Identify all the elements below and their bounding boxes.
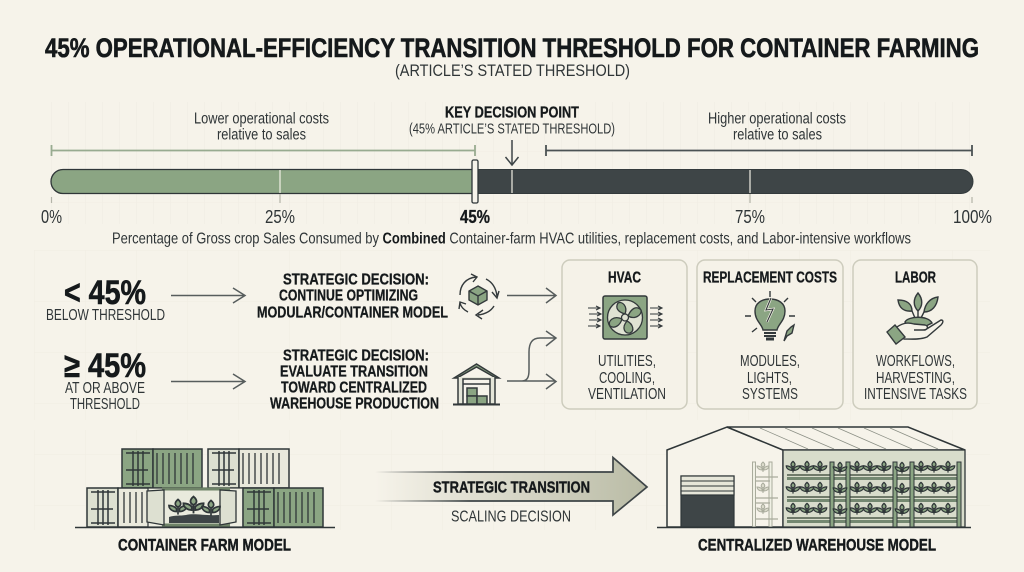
- building shell: [667, 427, 783, 527]
- panel: HVAC: [562, 260, 687, 409]
- arrows: transition to cost panels: [507, 331, 556, 389]
- below threshold stat: < 45%: [64, 274, 146, 312]
- decision: continue optimizing: CONTINUE OPTIMIZING: [279, 288, 418, 304]
- panel: HVAC: VENTILATION: [588, 386, 666, 403]
- title: [45, 33, 979, 80]
- lower cost label: Lower operational costs: [194, 110, 329, 128]
- arrow: decision point: [506, 140, 518, 165]
- panel: labor: WORKFLOWS,: [876, 353, 955, 370]
- threshold marker: [472, 160, 478, 203]
- progress bar: [51, 160, 973, 203]
- decision: evaluate transition: STRATEGIC DECISION:: [283, 348, 429, 364]
- panel: replacement costs: REPLACEMENT COSTS: [703, 270, 837, 286]
- threshold scale chart: [41, 104, 992, 248]
- decision: continue optimizing: MODULAR/CONTAINER MODEL: [257, 304, 448, 322]
- icon: fan: [588, 296, 662, 339]
- key decision point label: (45% ARTICLE’S STATED THRESHOLD): [409, 120, 615, 138]
- arrow: strategic transition: STRATEGIC TRANSITION: [433, 480, 590, 496]
- arrow: continue to cost panels: [507, 288, 556, 303]
- axis labels: [41, 207, 992, 227]
- roll-up door: [681, 476, 734, 527]
- icon: cube with cycle arrows: [459, 274, 499, 319]
- lower cost bracket: [52, 145, 475, 156]
- higher cost label: [708, 110, 846, 144]
- decision: continue optimizing: STRATEGIC DECISION:: [283, 272, 429, 288]
- below threshold stat: [46, 274, 165, 324]
- higher cost label: Higher operational costs: [708, 110, 846, 128]
- axis labels: 25%: [265, 207, 295, 227]
- panel: HVAC: UTILITIES,: [598, 353, 656, 370]
- label: centralized warehouse model: CENTRALIZED WAREHOUSE MODEL: [698, 536, 936, 554]
- subtitle: (ARTICLE’S STATED THRESHOLD): [395, 61, 630, 80]
- key decision point label: KEY DECISION POINT: [445, 104, 579, 122]
- at or above threshold stat: ≥ 45%: [64, 347, 146, 385]
- lower cost label: relative to sales: [217, 126, 306, 144]
- axis caption: Percentage of Gross crop Sales Consumed by Combined Container-farm HVAC utilities, replacement costs, and Labor-intensive workflows: [112, 230, 911, 248]
- panel: replacement costs: LIGHTS,: [747, 370, 792, 387]
- illustration: centralized warehouse: [657, 427, 971, 528]
- higher cost label: relative to sales: [733, 126, 822, 144]
- grow racks with plants: [786, 461, 961, 527]
- axis labels: 45%: [460, 207, 490, 227]
- panel: HVAC: COOLING,: [599, 370, 655, 387]
- axis labels: 75%: [735, 207, 765, 227]
- at or above threshold stat: [64, 347, 146, 413]
- panel: HVAC: HVAC: [608, 270, 641, 286]
- pale rack: [752, 462, 778, 527]
- lower cost label: [194, 110, 329, 144]
- arrow: above threshold to decision: [171, 374, 245, 389]
- panel: labor: HARVESTING,: [876, 370, 955, 387]
- container: bottom right: [243, 488, 323, 527]
- container: open with plants: [147, 488, 243, 527]
- arrow: strategic transition: [375, 457, 647, 526]
- icon: broken light bulb: [745, 291, 795, 341]
- panel: labor: LABOR: [895, 270, 936, 286]
- decision: evaluate transition: EVALUATE TRANSITION: [280, 364, 428, 380]
- axis labels: 0%: [41, 207, 62, 227]
- arrow: below threshold to decision: [171, 288, 245, 303]
- label: container farm model: CONTAINER FARM MODEL: [118, 536, 291, 554]
- key decision point label: [409, 104, 615, 138]
- panel: replacement costs: MODULES,: [740, 353, 800, 370]
- container: bottom left: [87, 488, 150, 527]
- panel: labor: INTENSIVE TASKS: [864, 386, 967, 403]
- at or above threshold stat: THRESHOLD: [70, 396, 140, 413]
- container: top right: [208, 449, 289, 488]
- panel: replacement costs: [697, 260, 843, 409]
- decision: evaluate transition: TOWARD CENTRALIZED: [281, 380, 427, 396]
- axis labels: 100%: [953, 207, 992, 227]
- at or above threshold stat: AT OR ABOVE: [65, 380, 145, 397]
- higher cost bracket: [546, 145, 972, 156]
- illustration: container farm: [75, 449, 335, 528]
- decision: evaluate transition: WAREHOUSE PRODUCTION: [270, 396, 439, 412]
- decision: evaluate transition: [270, 348, 439, 412]
- container: top left: [122, 449, 202, 488]
- below threshold stat: BELOW THRESHOLD: [46, 307, 165, 324]
- icon: hand holding plant: [887, 293, 943, 344]
- arrow: strategic transition: SCALING DECISION: [451, 508, 571, 526]
- decision: continue optimizing: [257, 272, 448, 322]
- icon: warehouse: [453, 364, 500, 404]
- panel: labor: [853, 260, 977, 409]
- panel: replacement costs: SYSTEMS: [742, 386, 798, 403]
